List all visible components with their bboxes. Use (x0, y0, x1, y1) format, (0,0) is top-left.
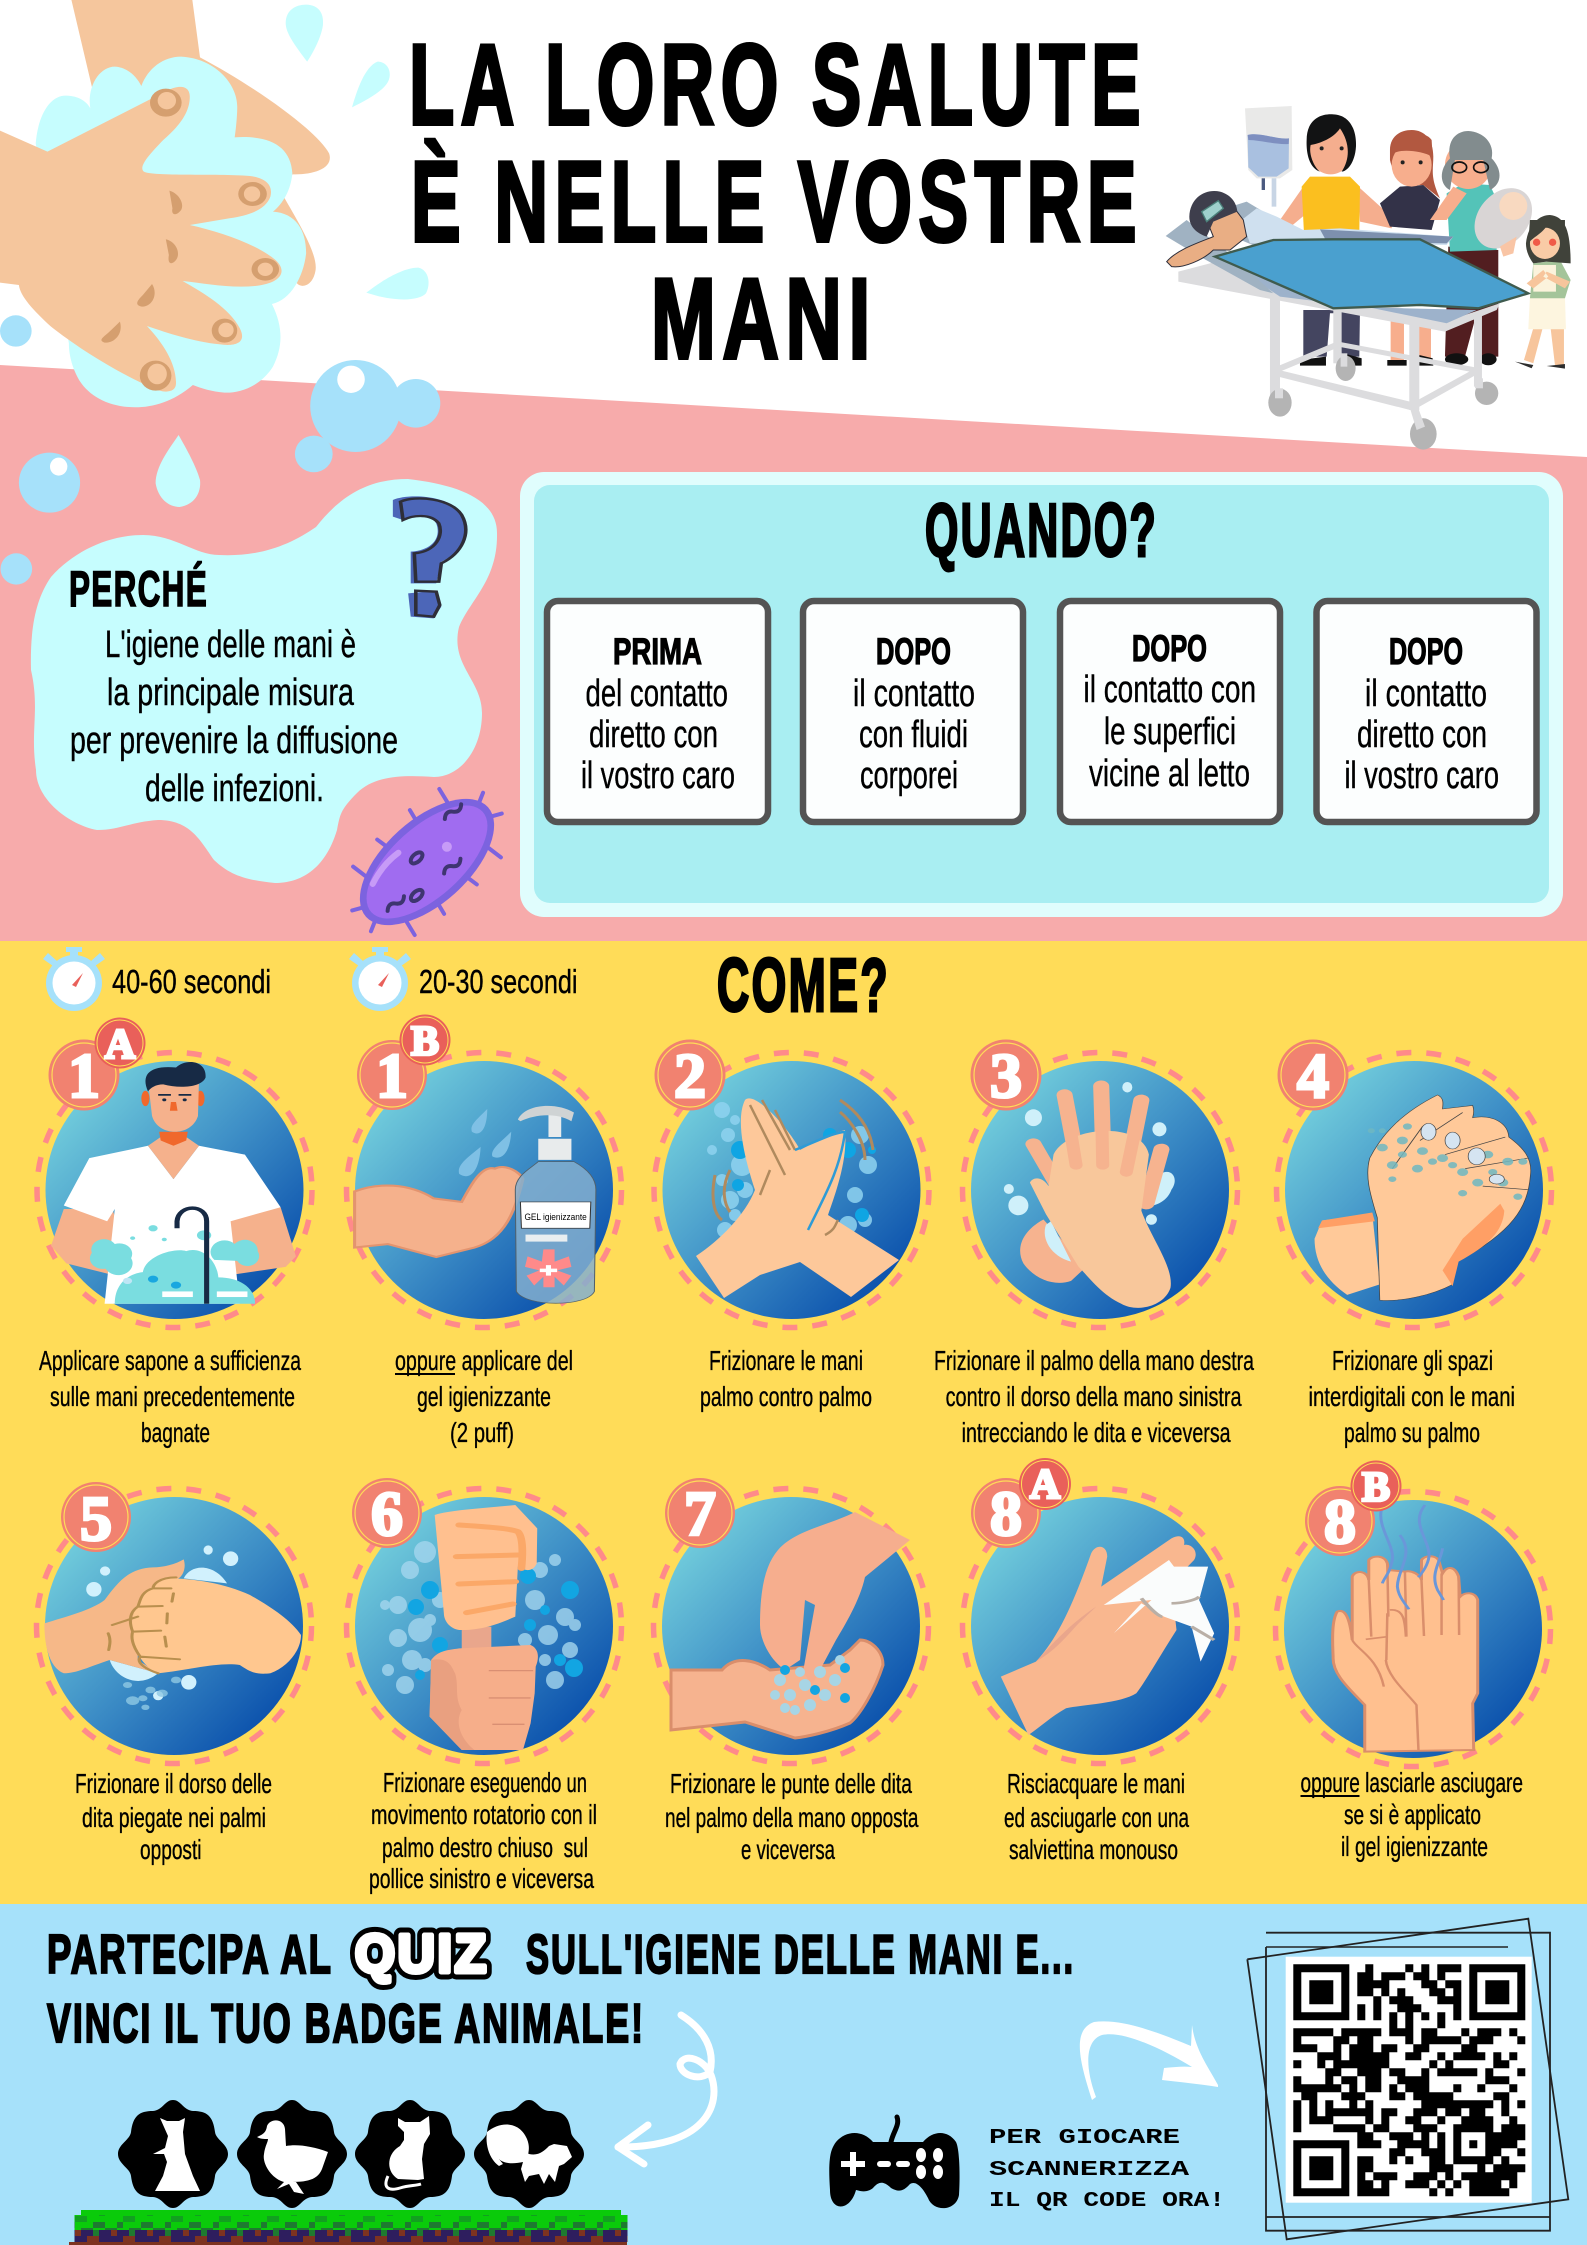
card: prima: del contatto (586, 673, 728, 715)
card: dopo superfici: le superfici (1104, 711, 1236, 753)
ground: pixel grass platform (69, 2210, 628, 2245)
caption: step 1B: oppure applicare del (395, 1345, 573, 1376)
badge: 4: 4 (1297, 1040, 1329, 1111)
illustration: hands washing with foam (0, 0, 330, 407)
caption: step 3: contro il dorso della mano sinistra (946, 1381, 1242, 1412)
card: prima: PRIMA (613, 631, 702, 672)
badge: 1B: B (411, 1019, 439, 1065)
icon: stopwatch 2 (349, 947, 411, 1011)
caption: step 3: intrecciando le dita e viceversa (962, 1417, 1231, 1448)
caption: step 8A: Risciacquare le mani (1007, 1768, 1185, 1799)
badge: 8B: B (1362, 1465, 1390, 1511)
caption: step 3: Frizionare il palmo della mano destra (934, 1345, 1254, 1376)
card: dopo contatto (1316, 601, 1536, 822)
heading: quando: QUANDO? (925, 488, 1158, 572)
text block: perché explanation: delle infezioni. (145, 768, 324, 810)
badge: 5: 5 (80, 1483, 112, 1554)
text block: perché explanation: la principale misura (107, 672, 355, 714)
text block: scan instructions: SCANNERIZZA (989, 2159, 1190, 2182)
figure: girl (1380, 130, 1440, 366)
card: dopo superfici: il contatto con (1084, 669, 1256, 711)
badge: 6 (352, 1478, 422, 1549)
caption: step 6: movimento rotatorio con il (371, 1799, 597, 1830)
icon: purple bacterium (328, 766, 526, 958)
step 6: rotational thumb (346, 1488, 622, 1764)
text block: perché explanation: L'igiene delle mani è (105, 624, 356, 666)
caption: step 4: interdigitali con le mani (1308, 1381, 1515, 1412)
step 4: interlaced fingers (1276, 1052, 1552, 1328)
caption: step 7: e viceversa (741, 1834, 835, 1865)
card: prima: il vostro caro (581, 755, 735, 797)
card: dopo superfici: vicine al letto (1089, 753, 1250, 795)
caption: step 2: palmo contro palmo (700, 1381, 872, 1412)
background: light blue band (0, 1904, 1587, 2245)
badge: 8A: 8 (990, 1478, 1022, 1549)
caption: step 8B: il gel igienizzante (1341, 1831, 1488, 1862)
title: È NELLE VOSTRE (411, 139, 1143, 266)
panel: perché blob (31, 479, 497, 883)
figure: blue blanket (1215, 239, 1528, 308)
card: dopo fluidi: DOPO (876, 631, 951, 672)
badge: 1A (48, 1018, 146, 1111)
badge: animal 1 (118, 2100, 228, 2208)
background: yellow band (0, 941, 1587, 1904)
badge: 5 (61, 1482, 131, 1554)
caption: step 8A (1004, 1768, 1189, 1865)
card: dopo contatto: DOPO (1389, 631, 1463, 672)
figure: grandmother with baby (1430, 131, 1544, 365)
caption: step 2: Frizionare le mani (709, 1345, 863, 1376)
label: timer 40-60: 40-60 secondi (112, 963, 271, 1000)
caption: step 7: nel palmo della mano opposta (665, 1802, 919, 1833)
badge: animal 2 (237, 2100, 347, 2208)
icon: IV bag (1245, 106, 1292, 207)
text block: scan instructions (989, 2127, 1225, 2213)
badge: 1A: 1 (68, 1040, 100, 1111)
caption: step 1B: gel igienizzante (417, 1381, 551, 1412)
step 1B: sanitising gel: GEL igienizzante (524, 1213, 587, 1223)
title: LA LORO SALUTE (409, 22, 1147, 149)
title (409, 22, 1147, 383)
step 8A: dry with towel (962, 1488, 1238, 1764)
icon: question mark (393, 496, 466, 618)
text block: scan instructions: PER GIOCARE (989, 2127, 1180, 2150)
caption: step 7: Frizionare le punte delle dita (670, 1768, 912, 1799)
heading: quiz call to action (47, 1923, 1075, 2054)
badge: animal 4 (474, 2100, 584, 2208)
step 3: palm over back of hand (962, 1052, 1238, 1328)
badge: 3: 3 (990, 1040, 1022, 1111)
card: dopo superfici (1060, 601, 1280, 822)
card: prima: diretto con (589, 714, 718, 756)
badge: 8B (1305, 1460, 1402, 1557)
label: quiz bubble text: QUIZ (355, 1924, 489, 1984)
caption: step 1A (39, 1345, 301, 1448)
badge: 6: 6 (371, 1478, 403, 1549)
card: dopo superfici: DOPO (1132, 628, 1207, 669)
caption: step 7 (665, 1768, 919, 1865)
icon: game controller (829, 2117, 960, 2208)
step 8B: air dry (1276, 1492, 1550, 1766)
caption: step 5: opposti (140, 1834, 202, 1865)
badge: 3 (970, 1040, 1042, 1111)
caption: step 1A: sulle mani precedentemente (50, 1381, 295, 1412)
caption: step 1A: bagnate (141, 1417, 210, 1448)
badge: 2 (654, 1040, 726, 1111)
background: pink band (0, 365, 1587, 942)
caption: step 1B (395, 1345, 573, 1448)
heading: quiz call to action: SULL'IGIENE DELLE MANI E... (526, 1923, 1075, 1985)
caption: step 5: dita piegate nei palmi (82, 1802, 266, 1833)
badge: 2: 2 (674, 1040, 706, 1111)
caption: step 2 (700, 1345, 872, 1412)
caption: step 1A: Applicare sapone a sufficienza (39, 1345, 301, 1376)
caption: step 8A: ed asciugarle con una (1004, 1802, 1189, 1833)
step 1A: wash with soap (37, 1052, 312, 1328)
arrow: white swoosh to QR code (1080, 2021, 1218, 2100)
caption: step 6: pollice sinistro e viceversa (369, 1863, 594, 1894)
card: dopo fluidi (803, 601, 1023, 822)
caption: step 5: Frizionare il dorso delle (75, 1768, 272, 1799)
badge: 4 (1278, 1040, 1348, 1111)
caption: step 4: Frizionare gli spazi (1332, 1345, 1493, 1376)
title: MANI (651, 256, 877, 383)
badge: animal 3 (355, 2100, 465, 2208)
caption: step 4 (1308, 1345, 1515, 1448)
caption: step 6 (369, 1767, 597, 1894)
illustration: patient on stretcher with family (1166, 106, 1571, 450)
card: dopo contatto: il vostro caro (1344, 755, 1499, 797)
card: prima (547, 601, 768, 822)
label: timer 20-30: 20-30 secondi (419, 963, 578, 1000)
illustration: soap drops and bubbles (0, 5, 440, 585)
label: quiz bubble text: QUIZ (355, 1924, 489, 1984)
caption: step 4: palmo su palmo (1344, 1417, 1480, 1448)
heading: quiz call to action: PARTECIPA AL (47, 1923, 333, 1985)
text block: scan instructions: IL QR CODE ORA! (989, 2190, 1225, 2213)
text block: perché explanation: per prevenire la diffusione (70, 720, 398, 762)
card: dopo contatto: diretto con (1357, 714, 1487, 756)
caption: step 8A: salviettina monouso (1009, 1834, 1178, 1865)
badge: 1B: 1 (376, 1040, 408, 1111)
heading: come: COME? (717, 943, 890, 1027)
QR code with frames (1247, 1919, 1568, 2239)
step 1B: sanitising gel (346, 1052, 622, 1328)
figure: patient (1166, 191, 1453, 293)
step 7: fingertips in palm (654, 1488, 928, 1764)
heading: quiz call to action: VINCI IL TUO BADGE ANIMALE! (47, 1992, 645, 2054)
step 2: palm to palm (654, 1052, 929, 1328)
figure: stretcher (1178, 257, 1500, 450)
caption: step 8B: se si è applicato (1344, 1799, 1481, 1830)
step 5: backs of fingers (36, 1488, 312, 1764)
badge: 7 (665, 1478, 735, 1549)
caption: step 8B (1300, 1767, 1523, 1862)
card: dopo fluidi: con fluidi (859, 714, 968, 756)
text block: perché explanation (70, 624, 398, 810)
panel: quando (520, 472, 1563, 917)
badge: 8A: A (1030, 1462, 1061, 1508)
caption: step 1B: (2 puff) (450, 1417, 514, 1448)
caption: step 6: Frizionare eseguendo un (383, 1767, 587, 1798)
figure: man in yellow (1280, 114, 1393, 366)
badge: 1A: A (105, 1022, 136, 1068)
card: dopo fluidi: il contatto (853, 673, 975, 715)
caption: step 3 (934, 1345, 1254, 1448)
card: dopo contatto: il contatto (1365, 673, 1487, 715)
badge: 8A (971, 1458, 1071, 1549)
badge: 8B: 8 (1324, 1486, 1356, 1557)
badge: 1B (357, 1014, 450, 1111)
icon: stopwatch 1 (43, 947, 105, 1011)
caption: step 5 (75, 1768, 272, 1865)
caption: step 6: palmo destro chiuso sul (382, 1832, 588, 1863)
badge: 7: 7 (684, 1478, 716, 1549)
card: dopo fluidi: corporei (860, 755, 958, 797)
background: white header (0, 0, 1587, 480)
figure: little girl (1515, 215, 1571, 369)
heading: perché: PERCHÉ (69, 561, 208, 617)
arrow: curly arrow to badges (618, 2015, 714, 2164)
